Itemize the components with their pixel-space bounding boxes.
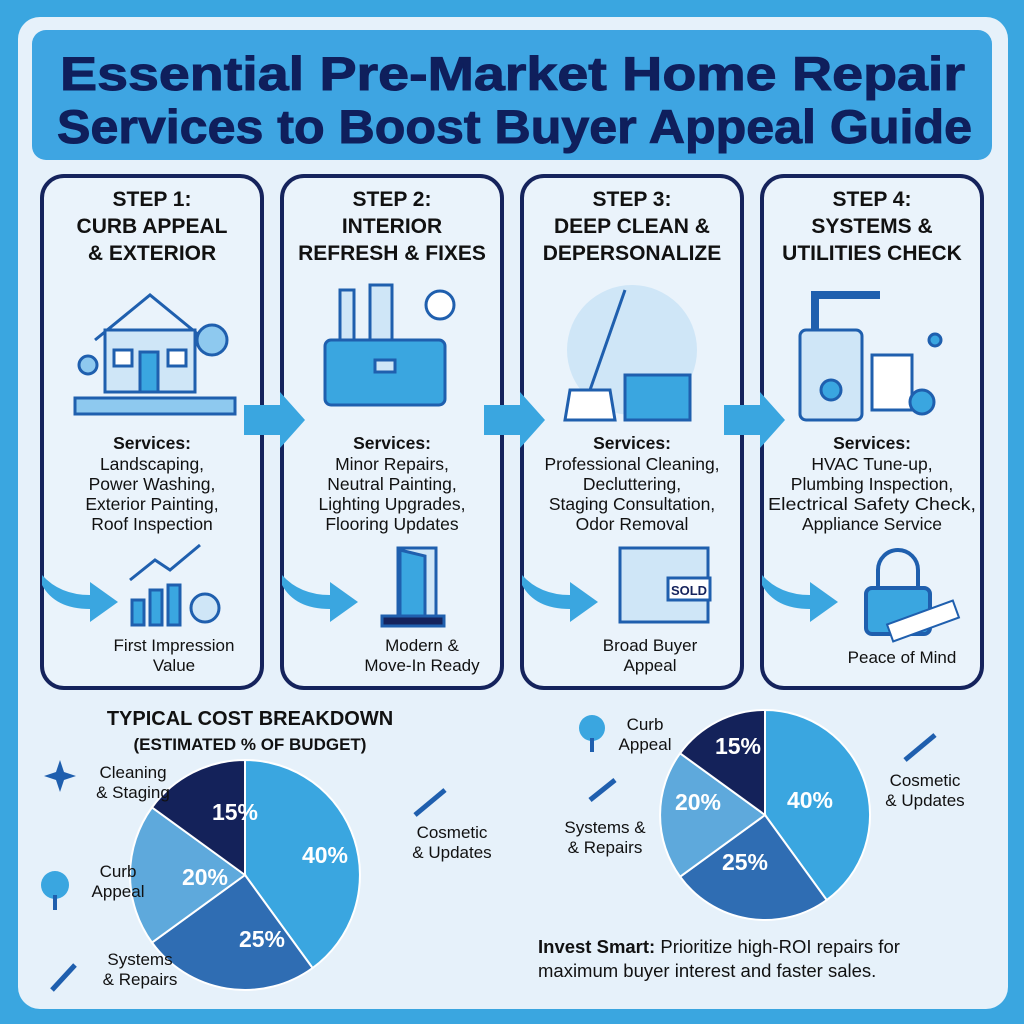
- panel: step 4: STEP 4:: [833, 188, 911, 211]
- right pie labels: & Repairs: [568, 838, 642, 857]
- heading: cost breakdown: (ESTIMATED % OF BUDGET): [134, 735, 366, 754]
- panel: step 3: DEPERSONALIZE: [543, 242, 721, 265]
- heading: cost breakdown: [107, 708, 393, 754]
- icon: sold frame: SOLD: [671, 583, 707, 598]
- icon: padlock certified: [866, 550, 959, 641]
- callout: invest smart: maximum buyer interest and faster sales.: [538, 960, 876, 981]
- left pie labels: & Updates: [412, 843, 492, 862]
- panel: step 4: UTILITIES CHECK: [782, 242, 962, 265]
- panel: step 2: Neutral Painting,: [327, 474, 457, 494]
- panel: step 2: INTERIOR: [342, 215, 442, 238]
- chart: left pie: 40%: [302, 842, 348, 868]
- panel: step 1: Roof Inspection: [91, 514, 213, 534]
- chart: right pie: 20%: [675, 789, 721, 815]
- left pie labels: Cleaning: [99, 763, 167, 782]
- panel: step 2: Services:: [353, 433, 431, 453]
- callout: invest smart: Invest Smart: Prioritize high-ROI repairs for: [538, 936, 900, 957]
- right pie labels: [564, 715, 965, 857]
- icon: water heater and tap: [800, 295, 941, 420]
- panel: step 3: DEEP CLEAN &: [554, 215, 710, 238]
- panel: step 3: Professional Cleaning,: [544, 454, 720, 474]
- panel: step 1: [42, 176, 262, 688]
- right pie labels: & Updates: [885, 791, 965, 810]
- arrows between panels: [42, 392, 838, 622]
- left pie labels: Cosmetic: [417, 823, 488, 842]
- panel: step 1: Services:: [113, 433, 191, 453]
- panel: step 2: REFRESH & FIXES: [298, 242, 486, 265]
- chart: left pie: 25%: [239, 926, 285, 952]
- icon: house: [75, 295, 235, 414]
- panel: step 3: Appeal: [624, 656, 676, 675]
- panel: step 3: [522, 176, 742, 688]
- chart: right pie: [660, 710, 870, 920]
- panel: step 3: Decluttering,: [583, 474, 681, 494]
- panel: step 2: Minor Repairs,: [335, 454, 449, 474]
- panel: step 1: Value: [153, 656, 195, 675]
- panel: step 1: Power Washing,: [89, 474, 215, 494]
- panel: step 2: [282, 176, 502, 688]
- left pie labels: & Staging: [96, 783, 170, 802]
- panel: step 1: CURB APPEAL: [77, 215, 228, 238]
- left pie labels: Systems: [107, 950, 173, 969]
- icon: growth chart: [130, 545, 219, 625]
- right pie labels: Curb: [627, 715, 663, 734]
- panel: step 4: Peace of Mind: [848, 648, 956, 667]
- heading: cost breakdown: TYPICAL COST BREAKDOWN: [107, 708, 393, 730]
- panel: step 1: STEP 1:: [113, 188, 191, 211]
- panel: step 2: Modern &: [385, 636, 460, 655]
- chart: right pie: 15%: [715, 733, 761, 759]
- panel: step 4: Appliance Service: [802, 514, 942, 534]
- icon: sold frame: [620, 548, 710, 622]
- right pie labels: Appeal: [619, 735, 671, 754]
- panel: step 3: Staging Consultation,: [549, 494, 715, 514]
- panel: step 4: Electrical Safety Check,: [768, 494, 976, 514]
- panel: step 3: Broad Buyer: [603, 636, 698, 655]
- left pie labels: [41, 760, 492, 990]
- panel: step 1: First Impression: [114, 636, 234, 655]
- panel: step 3: STEP 3:: [593, 188, 671, 211]
- icon: toolbox: [325, 285, 454, 405]
- chart: left pie: 20%: [182, 864, 228, 890]
- panel: step 1: Exterior Painting,: [85, 494, 219, 514]
- icon: mop and box: [565, 285, 697, 420]
- title: Essential Pre-Market Home Repair: [60, 47, 965, 100]
- chart: left pie: 15%: [212, 799, 258, 825]
- panel: step 4: [762, 176, 982, 688]
- panel: step 4: Services:: [833, 433, 911, 453]
- panel: step 2: Move-In Ready: [364, 656, 480, 675]
- panel: step 1: & EXTERIOR: [88, 242, 216, 265]
- panel: step 3: Odor Removal: [576, 514, 688, 534]
- panel: step 1: Landscaping,: [100, 454, 204, 474]
- chart: right pie: 40%: [787, 787, 833, 813]
- title: [32, 30, 992, 160]
- panel: step 3: Services:: [593, 433, 671, 453]
- panel: step 2: STEP 2:: [353, 188, 431, 211]
- panel: step 2: Flooring Updates: [325, 514, 459, 534]
- chart: left pie: [130, 760, 360, 990]
- left pie labels: Curb: [100, 862, 136, 881]
- panel: step 2: Lighting Upgrades,: [319, 494, 465, 514]
- chart: right pie: 25%: [722, 849, 768, 875]
- right pie labels: Cosmetic: [890, 771, 961, 790]
- callout: invest smart: [538, 936, 900, 981]
- panel: step 4: SYSTEMS &: [811, 215, 933, 238]
- panel: step 4: Plumbing Inspection,: [791, 474, 953, 494]
- left pie labels: Appeal: [92, 882, 144, 901]
- panel: step 4: HVAC Tune-up,: [811, 454, 933, 474]
- right pie labels: Systems &: [564, 818, 646, 837]
- icon: door: [382, 548, 444, 626]
- left pie labels: & Repairs: [103, 970, 177, 989]
- title: Services to Boost Buyer Appeal Guide: [57, 100, 972, 153]
